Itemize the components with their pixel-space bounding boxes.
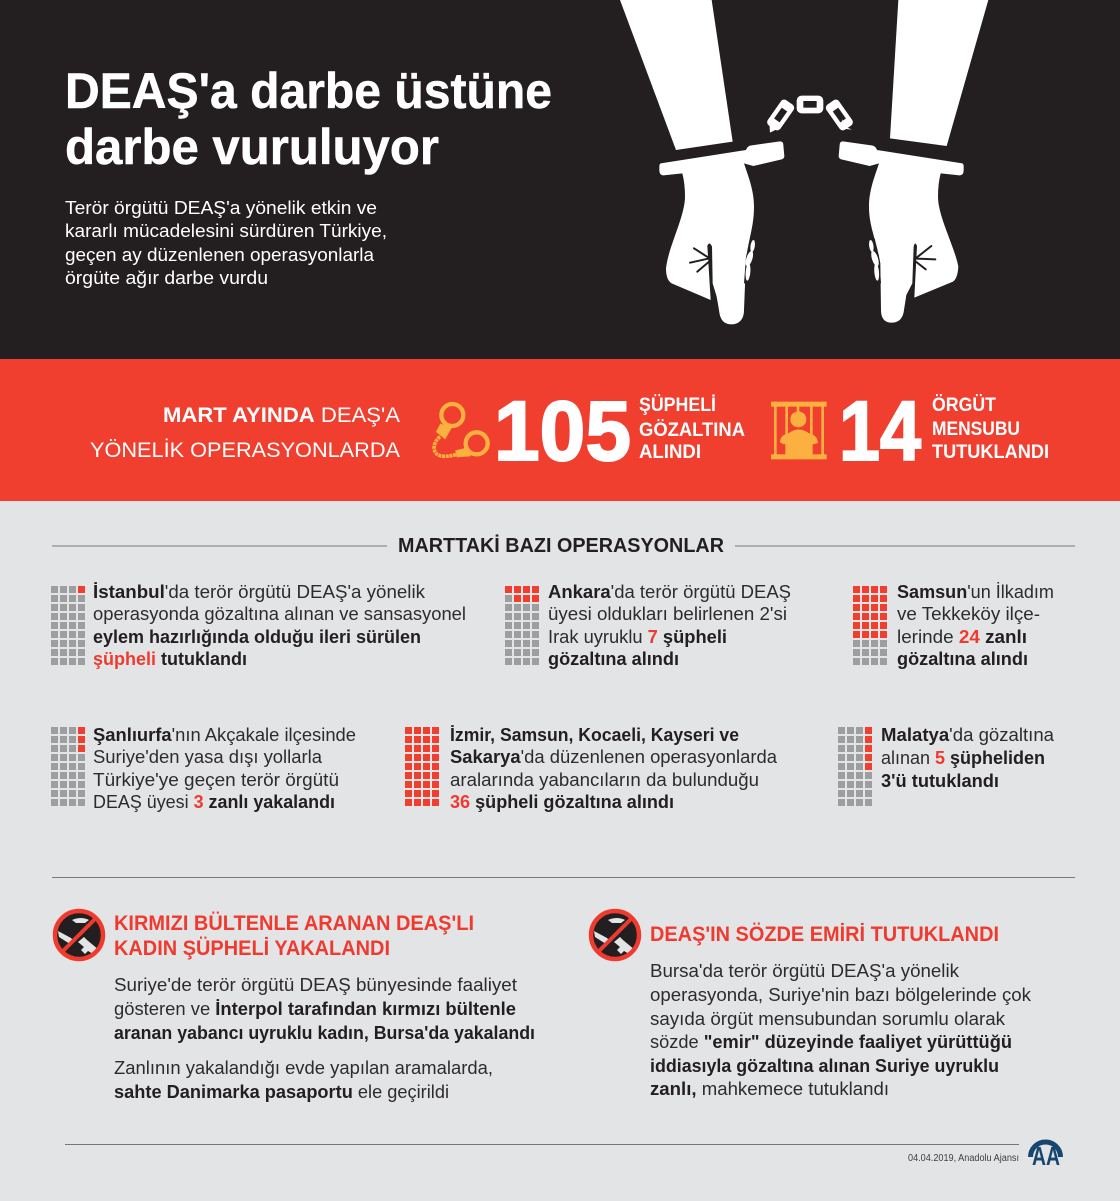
intro text: kararlı mücadelesini sürdüren Türkiye,	[65, 221, 387, 241]
icon: handcuffs	[434, 404, 488, 457]
grid icon: Istanbul	[51, 586, 85, 665]
stat: 105 detained	[494, 384, 745, 478]
stat: 14 arrested	[839, 384, 1049, 478]
text: Ankara: üyesi oldukları belirlenen 2'si	[548, 604, 787, 624]
grid icon: Izmir	[405, 727, 441, 808]
text: red notice: sahte Danimarka pasaportu ele geçirildi	[114, 1082, 449, 1102]
text: Izmir: İzmir, Samsun, Kocaeli, Kayseri ve	[450, 725, 739, 745]
icon: crossed-out militant	[591, 911, 639, 959]
text: Ankara: gözaltına alındı	[548, 649, 679, 669]
text: emir	[650, 961, 1032, 1099]
panel: Izmir and other provinces operation	[405, 725, 778, 812]
text: Izmir: aralarında yabancıların da bulunduğu	[450, 770, 759, 790]
text: Istanbul: İstanbul'da terör örgütü DEAŞ'a yönelik	[93, 582, 426, 602]
title	[65, 63, 552, 175]
text: Malatya: 3'ü tutuklandı	[881, 771, 999, 791]
stat: 105 detained: ŞÜPHELİ	[639, 395, 716, 416]
panel: Samsun operation	[853, 582, 1054, 669]
stat: 14 arrested: TUTUKLANDI	[932, 442, 1049, 463]
heading: emir: DEAŞ'IN SÖZDE EMİRİ TUTUKLANDI	[650, 923, 999, 946]
panel: Ankara operation	[505, 582, 791, 669]
band lead text: YÖNELİK OPERASYONLARDA	[90, 439, 400, 462]
text: emir: zanlı, mahkemece tutuklandı	[650, 1079, 889, 1099]
text: emir: sayıda örgüt mensubundan sorumlu olarak	[650, 1009, 1006, 1029]
heading: red notice	[114, 912, 474, 960]
text: Samsun: gözaltına alındı	[897, 649, 1028, 669]
intro text: geçen ay düzenlenen operasyonlarla	[65, 245, 375, 265]
icon: crossed-out militant	[55, 911, 103, 959]
section heading: operations: MARTTAKİ BAZI OPERASYONLAR	[398, 534, 725, 557]
text: Sanliurfa: Şanlıurfa'nın Akçakale ilçesinde	[93, 725, 356, 745]
icon: prisoner behind bars	[771, 402, 827, 459]
intro text: Terör örgütü DEAŞ'a yönelik etkin ve	[65, 198, 377, 218]
text: Ankara: Irak uyruklu 7 şüpheli	[548, 627, 727, 647]
text: Izmir: Sakarya'da düzenlenen operasyonlarda	[450, 747, 778, 767]
grid icon: Ankara	[505, 586, 541, 665]
text: red notice	[114, 975, 535, 1102]
text: emir: operasyonda, Suriye'nin bazı bölgelerinde çok	[650, 985, 1032, 1005]
text: Samsun	[897, 582, 1054, 669]
text: Malatya: Malatya'da gözaltına	[881, 725, 1055, 745]
grid icon: Samsun	[853, 586, 889, 665]
intro text: örgüte ağır darbe vurdu	[65, 268, 268, 288]
text: Malatya: alınan 5 şüpheliden	[881, 748, 1045, 768]
text: red notice: Suriye'de terör örgütü DEAŞ bünyesinde faaliyet	[114, 975, 517, 995]
text: red notice: Zanlının yakalandığı evde yapılan aramalarda,	[114, 1058, 493, 1078]
text: Ankara	[548, 582, 791, 669]
illustration: handcuffed hands with broken chain	[620, 0, 988, 324]
stat: 14 arrested: MENSUBU	[932, 419, 1020, 440]
panel: red notice suspect	[55, 911, 535, 1102]
text: Istanbul: şüpheli tutuklandı	[93, 649, 247, 669]
panel: Sanliurfa operation	[51, 725, 356, 812]
title: DEAŞ'a darbe üstüne	[65, 63, 552, 119]
text: emir: sözde "emir" düzeyinde faaliyet yürüttüğü	[650, 1032, 1012, 1052]
text: emir: Bursa'da terör örgütü DEAŞ'a yönelik	[650, 961, 960, 981]
text: Istanbul: eylem hazırlığında olduğu ileri sürülen	[93, 627, 421, 647]
stat: 105 detained: GÖZALTINA	[639, 420, 745, 441]
grid icon: Malatya	[838, 727, 872, 806]
text: Izmir: 36 şüpheli gözaltına alındı	[450, 792, 674, 812]
text: red notice: aranan yabancı uyruklu kadın, Bursa'da yakalandı	[114, 1023, 535, 1043]
text: Sanliurfa: Suriye'den yasa dışı yollarla	[93, 747, 323, 767]
panel: Istanbul operation	[51, 582, 466, 669]
text: Samsun: lerinde 24 zanlı	[897, 627, 1027, 647]
panel: dark header	[0, 0, 1120, 359]
text: emir: iddiasıyla gözaltına alınan Suriye uyruklu	[650, 1056, 999, 1076]
stat: 14 arrested: 14	[839, 384, 921, 478]
text: Istanbul: operasyonda gözaltına alınan ve sansasyonel	[93, 604, 466, 624]
heading: red notice: KIRMIZI BÜLTENLE ARANAN DEAŞ'LI	[114, 912, 474, 935]
stat: 14 arrested: ÖRGÜT	[932, 395, 996, 416]
text: Sanliurfa	[93, 725, 356, 812]
panel: Malatya operation	[838, 725, 1055, 806]
stat: 105 detained: ALINDI	[639, 442, 701, 463]
text: Ankara: Ankara'da terör örgütü DEAŞ	[548, 582, 791, 602]
grid icon: Sanliurfa	[51, 727, 85, 806]
text: Malatya	[881, 725, 1055, 791]
heading: red notice: KADIN ŞÜPHELİ YAKALANDI	[114, 937, 390, 960]
panel: red statistics band	[0, 359, 1120, 501]
text: Samsun: Samsun'un İlkadım	[897, 582, 1054, 602]
panel: so-called emir arrested	[591, 911, 1032, 1099]
title: darbe vuruluyor	[65, 119, 439, 175]
icon: Anadolu Agency logo: AA	[1032, 1141, 1060, 1171]
intro text	[65, 198, 387, 288]
source credit: 04.04.2019, Anadolu Ajansı	[908, 1153, 1019, 1164]
text: Sanliurfa: Türkiye'ye geçen terör örgütü	[93, 770, 339, 790]
text: Sanliurfa: DEAŞ üyesi 3 zanlı yakalandı	[93, 792, 335, 812]
footer	[65, 1141, 1061, 1171]
text: Istanbul	[93, 582, 466, 669]
text: Samsun: ve Tekkeköy ilçe-	[897, 604, 1040, 624]
band lead text	[90, 404, 400, 462]
stat: 105 detained: 105	[494, 384, 631, 478]
text: red notice: gösteren ve İnterpol tarafından kırmızı bültenle	[114, 999, 516, 1019]
band lead text: MART AYINDA DEAŞ'A	[163, 404, 400, 427]
text: Izmir	[450, 725, 778, 812]
